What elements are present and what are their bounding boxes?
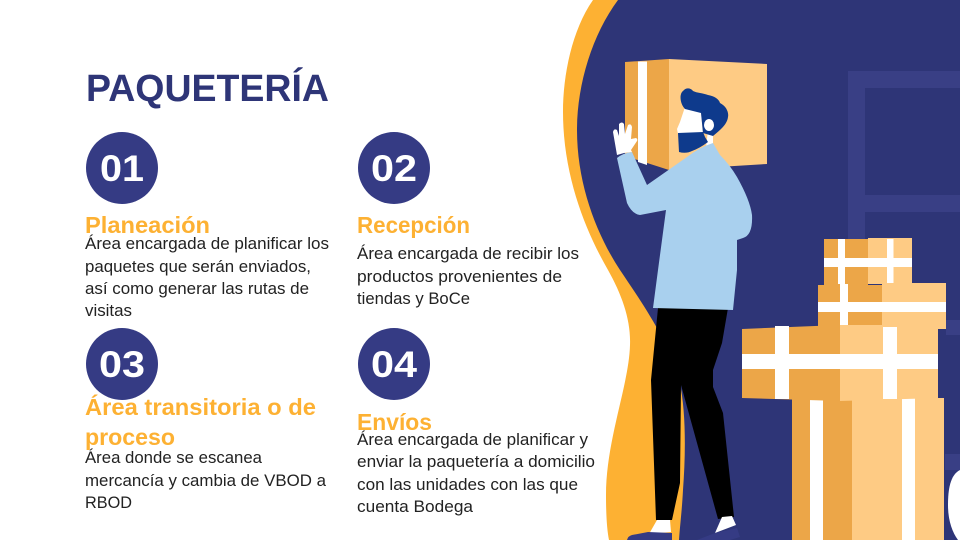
shelf silhouette [848, 71, 960, 470]
body text 01: paquetes que serán enviados, [85, 258, 311, 276]
box: second [818, 283, 946, 329]
hair [681, 88, 728, 136]
number badge 03 [86, 328, 158, 400]
body text 03: RBOD [85, 494, 132, 512]
number badge 01: 01 [100, 148, 144, 189]
white blob at right edge [948, 470, 960, 540]
body text 02 [357, 244, 579, 308]
hand [613, 122, 637, 155]
title: PAQUETERÍA [86, 66, 329, 110]
body text 01: Área encargada de planificar los [85, 234, 329, 253]
item 02: Recepción [357, 132, 579, 308]
heading: Área transitoria o de proceso: Área transitoria o de [85, 393, 316, 420]
item 01: Planeación [85, 132, 329, 320]
legs [651, 308, 734, 520]
body text 04 [357, 430, 595, 516]
body text 03: Área donde se escanea [85, 448, 263, 467]
heading: Área transitoria o de proceso [85, 393, 316, 450]
item 03: Área transitoria o de proceso [85, 328, 327, 512]
number badge 03: 03 [99, 344, 145, 385]
beard [678, 132, 708, 153]
box: bottom tall [792, 398, 944, 540]
body text 01 [85, 234, 329, 320]
shoes [627, 528, 740, 540]
face [677, 107, 703, 134]
number badge 04 [358, 328, 430, 400]
stacked boxes [742, 238, 946, 540]
body text 03: mercancía y cambia de VBOD a [85, 472, 327, 490]
body text 04: Área encargada de planificar y [357, 430, 589, 449]
jacket [617, 143, 752, 310]
body text 02: productos provenientes de [357, 268, 562, 286]
orange wave shape [563, 0, 700, 540]
heading: Recepción: Recepción [357, 212, 470, 238]
body text 04: cuenta Bodega [357, 498, 474, 516]
ear [704, 119, 714, 131]
heading: Planeación: Planeación [85, 212, 210, 238]
number badge 01 [86, 132, 158, 204]
neck [706, 130, 713, 148]
person [613, 88, 752, 540]
body text 04: con las unidades con las que [357, 476, 578, 494]
box: top [824, 238, 912, 285]
heading: Envíos: Envíos [357, 409, 432, 435]
number badge 02: 02 [371, 148, 417, 189]
socks [649, 516, 736, 534]
body text 03 [85, 448, 327, 512]
box: third wide [742, 325, 938, 401]
item 04: Envíos [357, 328, 595, 516]
number badge 04: 04 [371, 344, 417, 385]
body text 01: así como generar las rutas de [85, 280, 309, 298]
heading: Área transitoria o de proceso: proceso [85, 424, 175, 450]
box held by person [625, 59, 767, 170]
body text 01: visitas [85, 302, 132, 320]
body text 02: Área encargada de recibir los [357, 244, 579, 263]
navy background shape [577, 0, 960, 540]
number badge 02 [358, 132, 430, 204]
body text 04: enviar la paquetería a domicilio [357, 453, 595, 471]
body text 02: tiendas y BoCe [357, 290, 470, 308]
